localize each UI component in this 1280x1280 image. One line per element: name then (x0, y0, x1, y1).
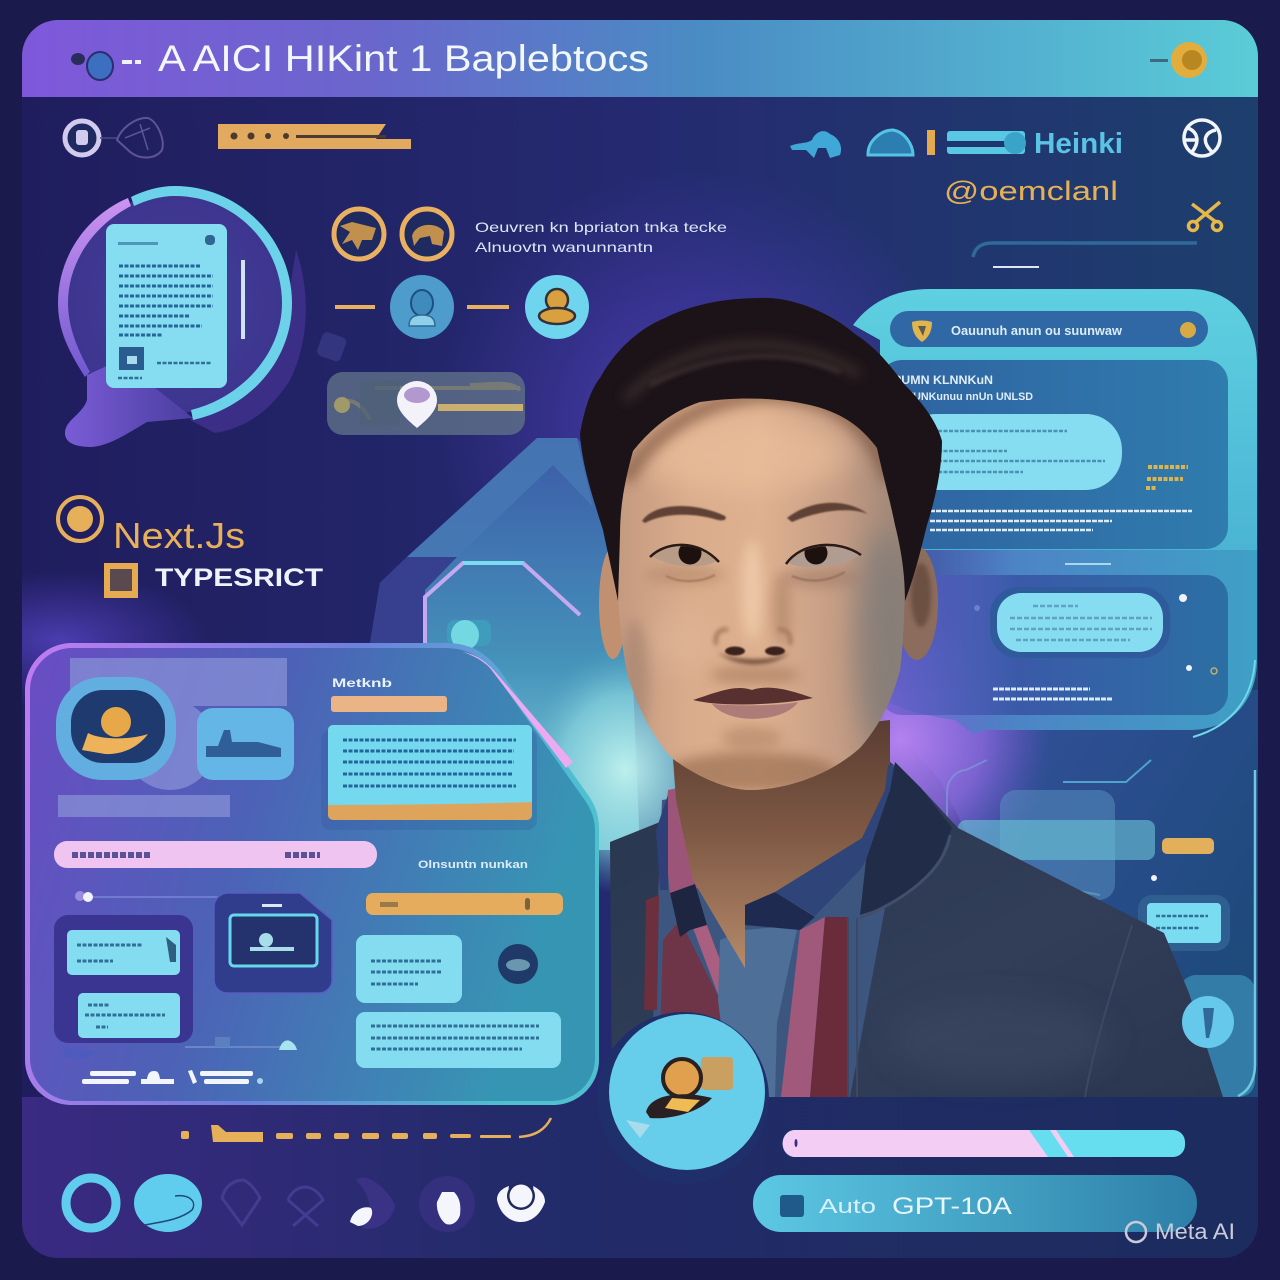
label: Heinki: Heinki (1034, 128, 1123, 160)
heading and orange tag (331, 676, 447, 712)
watermark (1126, 1219, 1235, 1244)
neck (672, 720, 890, 968)
mouth (693, 688, 813, 719)
orange top-left label bar (218, 124, 411, 149)
blue text card (321, 725, 537, 830)
faint tile (316, 331, 348, 363)
crossed tools icon (1188, 202, 1222, 230)
heading and orange tag: Metknb (332, 676, 392, 690)
document card (106, 224, 227, 388)
avatar connector row (335, 275, 589, 339)
hexagon backdrop outlines (370, 438, 730, 895)
side note (1146, 467, 1188, 488)
ears (599, 546, 938, 660)
hair (580, 298, 942, 601)
lower-right ghost screens (947, 760, 1255, 1097)
dark message area (880, 360, 1228, 549)
model pill: GPT-10A (892, 1193, 1012, 1220)
Next.js label: Next.Js (113, 515, 245, 556)
timeline connector (75, 891, 219, 902)
chat bubble (900, 414, 1122, 490)
face shading (621, 395, 915, 792)
model pill: Auto (819, 1196, 876, 1218)
dark message area: PUMN KLNNKuN (893, 373, 993, 387)
icon: vase (419, 1176, 475, 1232)
top-left icons (65, 118, 163, 158)
left panel (25, 643, 599, 1105)
small status caption: Olnsuntn nunkan (418, 859, 528, 871)
header band (22, 20, 1258, 97)
panel image mosaic (58, 658, 287, 817)
header coin icon (1150, 42, 1207, 78)
nose (716, 630, 790, 664)
model pill (753, 1175, 1197, 1232)
globe icon (1184, 120, 1220, 156)
dark message block (54, 915, 193, 1043)
small caption text: Oeuvren kn bpriaton tnka tecke (475, 219, 727, 235)
progress bar (783, 1130, 1185, 1157)
TypeScript label (104, 563, 323, 598)
icon: ring (66, 1178, 116, 1228)
Next.js label (58, 497, 245, 556)
portrait (580, 298, 1223, 1097)
bottom dashed orange line (181, 1118, 551, 1142)
icon: dim cross (288, 1187, 323, 1226)
scroll bar (241, 260, 245, 339)
handle text: @oemclanl (944, 176, 1118, 206)
TypeScript label: TYPESRICT (155, 564, 323, 592)
header title: A AICI HIKint 1 Baplebtocs (158, 38, 649, 79)
right chat panel (853, 289, 1257, 737)
small round pin icon (1182, 996, 1234, 1048)
icon: eye (497, 1182, 545, 1222)
long text lines (930, 511, 1192, 530)
text card (356, 935, 462, 1003)
bottom icon row (66, 1174, 545, 1232)
lower message area (880, 575, 1228, 715)
small caption text (475, 219, 727, 255)
thin arc decoration (973, 243, 1197, 268)
speech bubble document (58, 186, 306, 447)
face (616, 390, 905, 790)
dark round icon (498, 944, 538, 984)
watermark: Meta AI (1155, 1219, 1235, 1244)
dark message area: WUNKunuu nnUn UNLSD (903, 391, 1033, 403)
footer white marks (82, 1070, 263, 1084)
monitor tile (214, 893, 332, 993)
lower-right backdrop (941, 690, 1258, 1097)
orange circle avatars (334, 209, 452, 259)
icon: white leaf (350, 1178, 395, 1229)
orange button (366, 893, 563, 915)
small image tile (197, 708, 294, 780)
circle avatar bubble (597, 1012, 769, 1184)
jacket (610, 762, 1223, 1097)
panel title pill: Oauunuh anun ou suunwaw (951, 323, 1123, 338)
round avatar tile (56, 677, 176, 780)
icon: speech bubble (134, 1174, 202, 1232)
small caption text: Alnuovtn wanunnantn (475, 239, 653, 255)
top-right icon row (790, 128, 1123, 160)
icon: dim heart (222, 1180, 260, 1225)
eyebrows (642, 503, 868, 523)
slider line (62, 1037, 297, 1058)
left eye (649, 544, 720, 582)
shirt collars (670, 765, 905, 937)
right eye (785, 544, 862, 582)
bottom text card (356, 1012, 561, 1068)
header logo icon (71, 52, 141, 80)
location pin card (327, 372, 525, 435)
panel title pill (890, 311, 1208, 347)
shirt (644, 765, 905, 1097)
pink input bar (54, 841, 377, 868)
jacket collar (848, 762, 1132, 1097)
